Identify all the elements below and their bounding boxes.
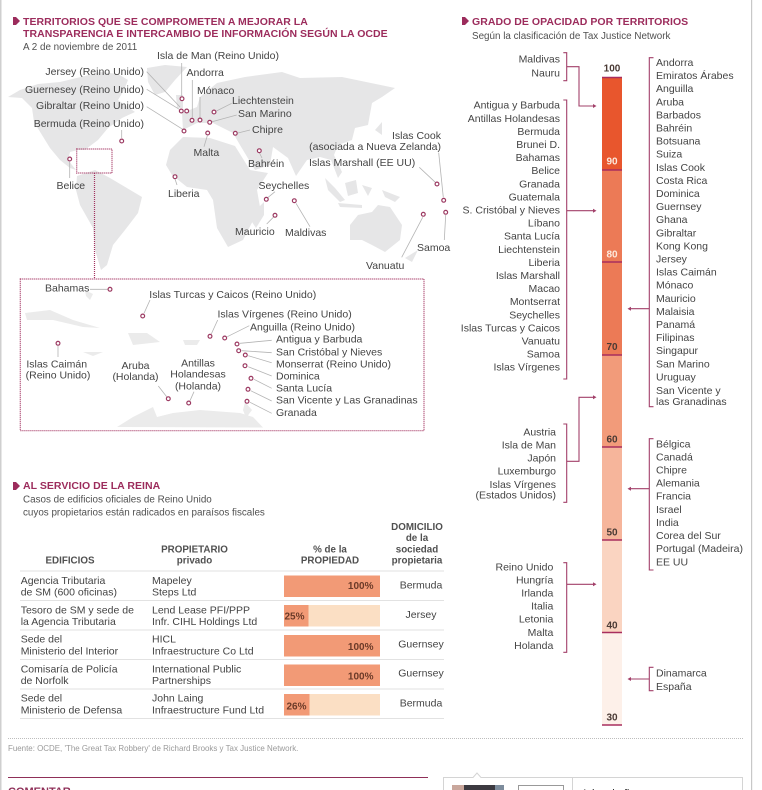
group: 70-90 left: Belice: [531, 165, 560, 177]
group: 40-50 left: Malta: [528, 627, 553, 639]
group: 70-90 left: Bermuda: [517, 126, 560, 138]
inset labels: Monserrat (Reino Unido): [276, 358, 391, 370]
group: 70-90 left: Antigua y Barbuda: [474, 100, 560, 112]
table row 1: 100%: [348, 581, 374, 592]
table row 5: [21, 693, 442, 716]
group: 70-90 left: Antillas Holandesas: [468, 113, 560, 125]
map labels: Gibraltar (Reino Unido): [36, 100, 144, 112]
opacity scale bar: [602, 64, 622, 725]
map labels: Malta: [194, 147, 219, 159]
group: 50-60 right: Chipre: [656, 464, 687, 476]
opacity subtitle: Según la clasificación de Tax Justice Network: [472, 31, 671, 42]
group: 90-100 left: Maldivas: [519, 54, 560, 66]
caribbean locator box: [77, 149, 112, 279]
group: 50-70 left: Japón: [527, 452, 556, 464]
group: 70-90 left: Montserrat: [510, 296, 560, 308]
table row 1: Steps Ltd: [152, 587, 197, 599]
map labels: (asociada a Nueva Zelanda): [309, 141, 441, 153]
map labels: Isla de Man (Reino Unido): [157, 50, 279, 62]
heading: territories: [13, 16, 388, 40]
group: 70-90 left: Samoa: [527, 349, 560, 361]
map labels: [25, 50, 450, 272]
group: 70-90 right: Islas Caimán: [656, 267, 717, 279]
table header: PROPIEDAD: [301, 555, 359, 566]
caribbean inset: [20, 279, 424, 431]
table row 2: Tesoro de SM y sede de: [21, 604, 134, 616]
group: 70-90 left: Granada: [519, 178, 560, 190]
group: 40-50 left: Letonia: [519, 614, 553, 626]
group: 70-90 right: Filipinas: [656, 332, 695, 344]
opacity scale bar: 90: [606, 157, 618, 168]
map labels: Maldivas: [285, 227, 326, 239]
inset labels: (Holanda): [112, 371, 159, 383]
inset labels: Holandesas: [170, 369, 226, 381]
group: 90-100 left: [519, 53, 596, 108]
heading: opacity: GRADO DE OPACIDAD POR TERRITORIOS: [472, 16, 688, 28]
map labels: Samoa: [417, 242, 450, 254]
opacity scale bar: 100: [604, 64, 621, 75]
group: 70-90 right: Bahréin: [656, 122, 692, 134]
map labels: Guernesey (Reino Unido): [25, 84, 144, 96]
inset labels: Aruba: [121, 360, 150, 372]
inset labels: San Cristóbal y Nieves: [276, 346, 382, 358]
group: 40-50 left: Holanda: [514, 640, 553, 652]
table header: de la: [406, 533, 429, 544]
group: 70-90 right: Emiratos Árabes: [656, 69, 734, 82]
table description: Casos de edificios oficiales de Reino Unido: [23, 494, 212, 505]
group: 70-90 right: Mónaco: [656, 280, 694, 292]
opacity scale bar: 70: [606, 342, 618, 353]
group: 70-90 right: Uruguay: [656, 371, 696, 383]
group: 70-90 right: Mauricio: [656, 293, 696, 305]
group: 70-90 left: Islas Turcas y Caicos: [461, 322, 560, 334]
group: 90-100 left: Nauru: [531, 68, 560, 80]
group: 70-90 right: las Granadinas: [656, 396, 727, 408]
group: 50-60 right: Francia: [656, 491, 691, 503]
table row 4: Guernsey: [398, 668, 445, 680]
map labels: Chipre: [252, 124, 283, 136]
group: 70-90 right: [628, 57, 734, 408]
map labels: Jersey (Reino Unido): [45, 66, 144, 78]
table row 2: 25%: [284, 611, 305, 622]
group: 30-40 right: Dinamarca: [656, 668, 707, 680]
panel: grado de opacidad: [461, 16, 743, 725]
table row 3: 100%: [348, 642, 374, 653]
map labels: Mauricio: [235, 226, 275, 238]
inset labels: (Holanda): [175, 380, 221, 392]
inset labels: Antillas: [181, 358, 215, 370]
inset labels: Dominica: [276, 370, 320, 382]
inset map: [25, 290, 263, 428]
group: 50-70 left: [475, 395, 596, 502]
table header: [46, 522, 443, 566]
group: 50-70 left: Islas Vírgenes: [489, 479, 556, 491]
group: 50-60 right: India: [656, 517, 679, 529]
group: 30-40 right: [628, 667, 707, 693]
heading: al servicio de la reina: AL SERVICIO DE LA REINA: [23, 480, 161, 492]
group: 70-90 left: Liberia: [528, 257, 560, 269]
map labels: Andorra: [186, 67, 224, 79]
table header: EDIFICIOS: [46, 555, 95, 566]
map labels: Bahréin: [248, 158, 284, 170]
group: 40-50 left: Reino Unido: [496, 561, 553, 573]
group: 70-90 left: [461, 100, 596, 379]
table row 5: Bermuda: [400, 697, 442, 709]
group: 50-60 right: Alemania: [656, 478, 700, 490]
heading: territories: TERRITORIOS QUE SE COMPROMETEN A MEJORAR LA: [23, 16, 308, 28]
group: 70-90 left: Guatemala: [509, 191, 560, 203]
inset labels: Islas Caimán: [26, 359, 87, 371]
group: 70-90 right: Botsuana: [656, 136, 701, 148]
map location dots: [68, 97, 448, 217]
group: 70-90 right: Andorra: [656, 57, 694, 69]
table row 1: Agencia Tributaria: [21, 575, 105, 587]
table row 4: Comisaría de Policía: [21, 663, 118, 675]
inset labels: (Reino Unido): [26, 370, 90, 382]
inset labels: Islas Turcas y Caicos (Reino Unido): [149, 289, 316, 301]
map labels: Liechtenstein: [232, 95, 294, 107]
group: 70-90 left: Liechtenstein: [498, 244, 560, 256]
group: 70-90 right: Kong Kong: [656, 240, 708, 252]
map labels: Mónaco: [197, 85, 235, 97]
group: 40-50 left: Hungría: [516, 574, 553, 586]
heading: territories: TRANSPARENCIA E INTERCAMBIO DE INFORMACIÓN SEGÚN LA OCDE: [23, 27, 388, 40]
table header: % de la: [313, 544, 347, 555]
table header: sociedad: [396, 544, 438, 555]
opacity scale bar: 50: [606, 527, 618, 538]
group: 30-40 right: España: [656, 681, 692, 693]
group: 50-60 right: Portugal (Madeira): [656, 543, 743, 555]
group: 40-50 left: Italia: [531, 601, 553, 613]
table row 4: Partnerships: [152, 675, 211, 687]
group: 70-90 right: Aruba: [656, 96, 684, 108]
group: 50-70 left: Luxemburgo: [498, 466, 556, 478]
table row 2: [21, 604, 437, 628]
group: 70-90 left: Líbano: [528, 218, 560, 230]
opacity scale bar: 40: [606, 620, 618, 631]
group: 50-60 right: EE UU: [656, 556, 688, 568]
group: 50-70 left: (Estados Unidos): [475, 489, 556, 501]
group: 70-90 right: Islas Cook: [656, 162, 706, 174]
group: 70-90 right: Suiza: [656, 149, 682, 161]
table row 3: Sede del: [21, 634, 62, 646]
group: 70-90 right: Malaisia: [656, 306, 695, 318]
group: 70-90 right: Ghana: [656, 214, 688, 226]
group: 70-90 left: Santa Lucía: [504, 231, 560, 243]
group: 70-90 right: San Vicente y: [656, 385, 721, 397]
table row 3: Ministerio del Interior: [21, 645, 119, 657]
inset labels: Islas Vírgenes (Reino Unido): [218, 309, 352, 321]
group: 70-90 left: S. Cristóbal y Nieves: [463, 204, 560, 216]
group: 70-90 right: Jersey: [656, 254, 688, 266]
table row 2: Jersey: [406, 609, 437, 621]
table row 5: Infraestructure Fund Ltd: [152, 704, 264, 716]
group: 70-90 left: Seychelles: [509, 309, 560, 321]
inset labels: Granada: [276, 407, 317, 419]
bottom widget: [444, 773, 742, 790]
inset labels: San Vicente y Las Granadinas: [276, 395, 418, 407]
map labels: Seychelles: [258, 180, 309, 192]
panel: al servicio de la reina: [13, 480, 445, 718]
map labels: Islas Cook: [392, 130, 442, 142]
group: 40-50 left: [496, 561, 596, 652]
table row 5: 26%: [286, 701, 307, 712]
map labels: Islas Marshall (EE UU): [309, 157, 415, 169]
group: 40-50 left: Irlanda: [521, 588, 553, 600]
opacity scale bar: 60: [606, 435, 618, 446]
panel: territories map: [8, 16, 450, 431]
group: 70-90 right: Gibraltar: [656, 227, 697, 239]
table description: cuyos propietarios están radicados en paraísos fiscales: [23, 508, 265, 519]
table row 4: 100%: [348, 671, 374, 682]
group: 70-90 right: Dominica: [656, 188, 700, 200]
table header: privado: [177, 555, 212, 566]
table row 2: Infr. CIHL Holdings Ltd: [152, 616, 257, 628]
table description: [23, 494, 265, 519]
opacity scale bar: 30: [606, 713, 618, 724]
table row 2: la Agencia Tributaria: [21, 616, 116, 628]
group: 70-90 right: Costa Rica: [656, 175, 708, 187]
inset labels: Bahamas: [45, 283, 89, 295]
table row 4: [21, 663, 445, 687]
map labels: Vanuatu: [366, 260, 404, 272]
group: 70-90 right: Barbados: [656, 109, 701, 121]
table header: PROPIETARIO: [161, 544, 228, 555]
date note: A 2 de noviembre de 2011: [23, 42, 137, 53]
table row 1: [21, 575, 442, 599]
table header: propietaria: [392, 555, 443, 566]
group: 70-90 left: Macao: [528, 283, 560, 295]
table row 5: John Laing: [152, 693, 204, 705]
table row 1: de SM (600 oficinas): [21, 587, 117, 599]
table row 3: [21, 634, 445, 657]
table row 2: Lend Lease PFI/PPP: [152, 604, 250, 616]
group: 70-90 left: Islas Vírgenes: [493, 362, 560, 374]
group: 70-90 right: Guernsey: [656, 201, 702, 213]
group: 70-90 right: Panamá: [656, 319, 695, 331]
world map: [8, 65, 418, 270]
leader lines: [70, 63, 446, 257]
group: 70-90 left: Bahamas: [516, 152, 560, 164]
map labels: San Marino: [238, 108, 292, 120]
group: 50-60 right: Bélgica: [656, 438, 691, 450]
inset dots: [56, 287, 253, 405]
group: 50-60 right: Israel: [656, 504, 682, 516]
group: 70-90 right: Anguilla: [656, 83, 694, 95]
table row 4: de Norfolk: [21, 675, 69, 687]
group: 50-70 left: Austria: [523, 426, 556, 438]
map labels: Liberia: [168, 188, 200, 200]
table row 3: HICL: [152, 634, 176, 646]
inset labels: Antigua y Barbuda: [276, 333, 363, 345]
inset labels: Anguilla (Reino Unido): [250, 322, 355, 334]
inset labels: Santa Lucía: [276, 383, 332, 395]
table header: DOMICILIO: [391, 522, 443, 533]
group: 70-90 right: San Marino: [656, 358, 710, 370]
table row 1: Bermuda: [400, 579, 442, 591]
group: 50-60 right: Canadá: [656, 451, 693, 463]
map labels: Bermuda (Reino Unido): [34, 118, 144, 130]
table row 3: Infraestructure Co Ltd: [152, 645, 254, 657]
group: 50-70 left: Isla de Man: [502, 439, 556, 451]
group: 50-60 right: Corea del Sur: [656, 530, 721, 542]
group: 70-90 right: Singapur: [656, 345, 699, 357]
table row 5: Ministerio de Defensa: [21, 704, 122, 716]
group: 70-90 left: Vanuatu: [522, 336, 560, 348]
inset labels: [26, 283, 418, 419]
table row 1: Mapeley: [152, 575, 192, 587]
group: 50-60 right: [628, 438, 743, 570]
inset leader lines: [58, 289, 272, 413]
table row 5: Sede del: [21, 693, 62, 705]
group: 70-90 left: Brunei D.: [516, 139, 560, 151]
opacity scale bar: 80: [606, 249, 618, 260]
map labels: Belice: [56, 180, 85, 192]
table row 3: Guernsey: [398, 638, 445, 650]
source note: Fuente: OCDE, 'The Great Tax Robbery' de Richard Brooks y Tax Justice Network.: [8, 744, 298, 753]
table row 4: International Public: [152, 663, 241, 675]
group: 70-90 left: Islas Marshall: [496, 270, 560, 282]
